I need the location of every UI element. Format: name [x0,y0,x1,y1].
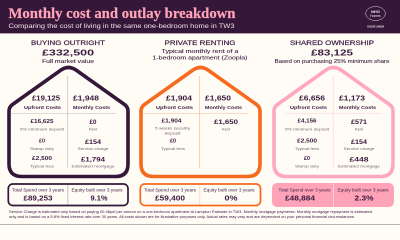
summary box: private renting [140,184,260,206]
logo: NHG Homes [366,6,385,28]
upfront costs: Typical fees [161,146,185,151]
upfront costs: £4,156 [298,118,316,124]
upfront costs: 5% minimum deposit [285,126,330,132]
summary box: private renting: Total Spend over 3 years [144,188,196,192]
column heading: shared ownership: £83,125 [311,48,353,58]
column heading: shared ownership [274,40,390,65]
monthly costs: £448 [350,156,369,164]
upfront costs [285,94,330,168]
upfront costs: Typical fees [295,146,319,151]
monthly costs: £154 [85,139,102,146]
upfront costs: Upfront Costs [24,105,61,111]
upfront costs: £1,904 [166,94,193,102]
summary box: shared ownership: Equity built over 3 years [338,188,388,192]
monthly costs: £1,650 [214,119,239,126]
upfront costs: £2,500 [32,156,52,162]
monthly costs: £1,948 [73,94,99,102]
summary box: private renting: Equity built over 3 years [204,188,254,192]
monthly costs: Monthly Costs [73,105,110,111]
column heading: buying outright: Full market value [42,59,94,65]
summary box: buying outright: Total Spend over 3 years [12,188,64,192]
upfront costs: deposit [164,130,182,136]
upfront costs: Stamp duty [30,146,54,151]
upfront costs: £6,656 [299,94,325,102]
summary box: private renting: 0% [224,196,238,202]
monthly costs: Monthly Costs [339,105,376,111]
summary box: buying outright [8,184,128,206]
logo: NHG Homes: Homes [370,14,381,18]
summary box: shared ownership [272,183,394,207]
monthly costs: £0 [90,119,97,126]
monthly costs: Monthly Costs [205,105,242,111]
column heading: buying outright: £332,500 [42,48,94,58]
upfront costs [20,94,65,168]
panel: private renting house [141,68,260,176]
panel: shared ownership house [274,68,393,176]
column heading: shared ownership: Based on purchasing 25% minimum share [274,59,390,65]
column heading: private renting: PRIVATE RENTING [164,40,236,47]
monthly costs: £571 [351,119,368,126]
column heading: private renting [152,40,248,62]
column heading: shared ownership: SHARED OWNERSHIP [290,40,374,47]
subtitle: Comparing the cost of living in the same one-bedroom home in TW3 [8,24,235,30]
header banner [0,0,400,34]
upfront costs: Upfront Costs [156,105,193,111]
monthly costs: Estimated mortgage [72,164,114,168]
monthly costs [205,94,242,132]
upfront costs: Stamp duty [295,164,319,168]
monthly costs: £1,650 [205,94,231,102]
monthly costs [338,94,380,168]
logo: NHG Homes: CHOOSE LONDON [367,26,384,28]
title: Monthly cost and outlay breakdown [8,6,236,22]
monthly costs: Estimated mortgage [338,164,380,168]
upfront costs: 5 weeks security [155,126,190,130]
monthly costs: Rent [355,126,364,132]
monthly costs: Service charge [78,146,108,151]
upfront costs: 5% minimum deposit [20,126,65,132]
column heading: private renting: 1-bedroom apartment (Zoopla) [152,56,248,62]
summary box: buying outright: 9.1% [90,196,108,202]
column heading: buying outright [31,40,105,65]
monthly costs: Rent [89,126,98,132]
footnote [9,210,372,219]
upfront costs: £1,904 [162,118,182,124]
upfront costs: £16,625 [30,119,54,125]
summary box: buying outright: £89,253 [24,196,53,202]
upfront costs: £2,500 [297,138,317,144]
footnote: only and is based on a 5.8% fixed interest rate over 30 years. All costs shown are for illustrative purposes only. Actual rates may vary and are dependent on your personal financial circumstances. [9,215,355,219]
upfront costs: £19,125 [32,94,61,102]
monthly costs: £1,173 [339,94,365,102]
upfront costs: Typical fees [30,164,54,168]
upfront costs: £0 [170,138,176,144]
monthly costs [72,94,114,168]
summary box: shared ownership: 2.3% [354,196,374,202]
upfront costs: £0 [39,138,45,144]
summary box: shared ownership: £48,884 [285,196,315,202]
monthly costs: £154 [351,139,368,146]
column heading: private renting: Typical monthly rent of a [162,49,239,55]
logo: NHG Homes: NHG [371,9,380,14]
upfront costs: Upfront Costs [290,105,327,111]
monthly costs: Rent [222,126,231,132]
upfront costs [155,94,193,151]
footnote: Service Charge is estimated only based on paying £0.48psf per annum on a one-bedroom apartment at Lampton Parkside in TW3. Monthly mortgage payments: Monthly mortgage repayment is estimated [9,210,372,214]
monthly costs: Service charge [344,146,374,151]
summary box: buying outright: Equity built over 3 years [72,188,122,192]
summary box: shared ownership: Total Spend over 3 years [278,188,330,192]
upfront costs: £0 [304,156,310,162]
column heading: buying outright: BUYING OUTRIGHT [31,40,105,47]
monthly costs: £1,794 [81,156,106,164]
summary box: private renting: £59,400 [155,196,185,202]
panel: buying outright house [9,68,128,176]
